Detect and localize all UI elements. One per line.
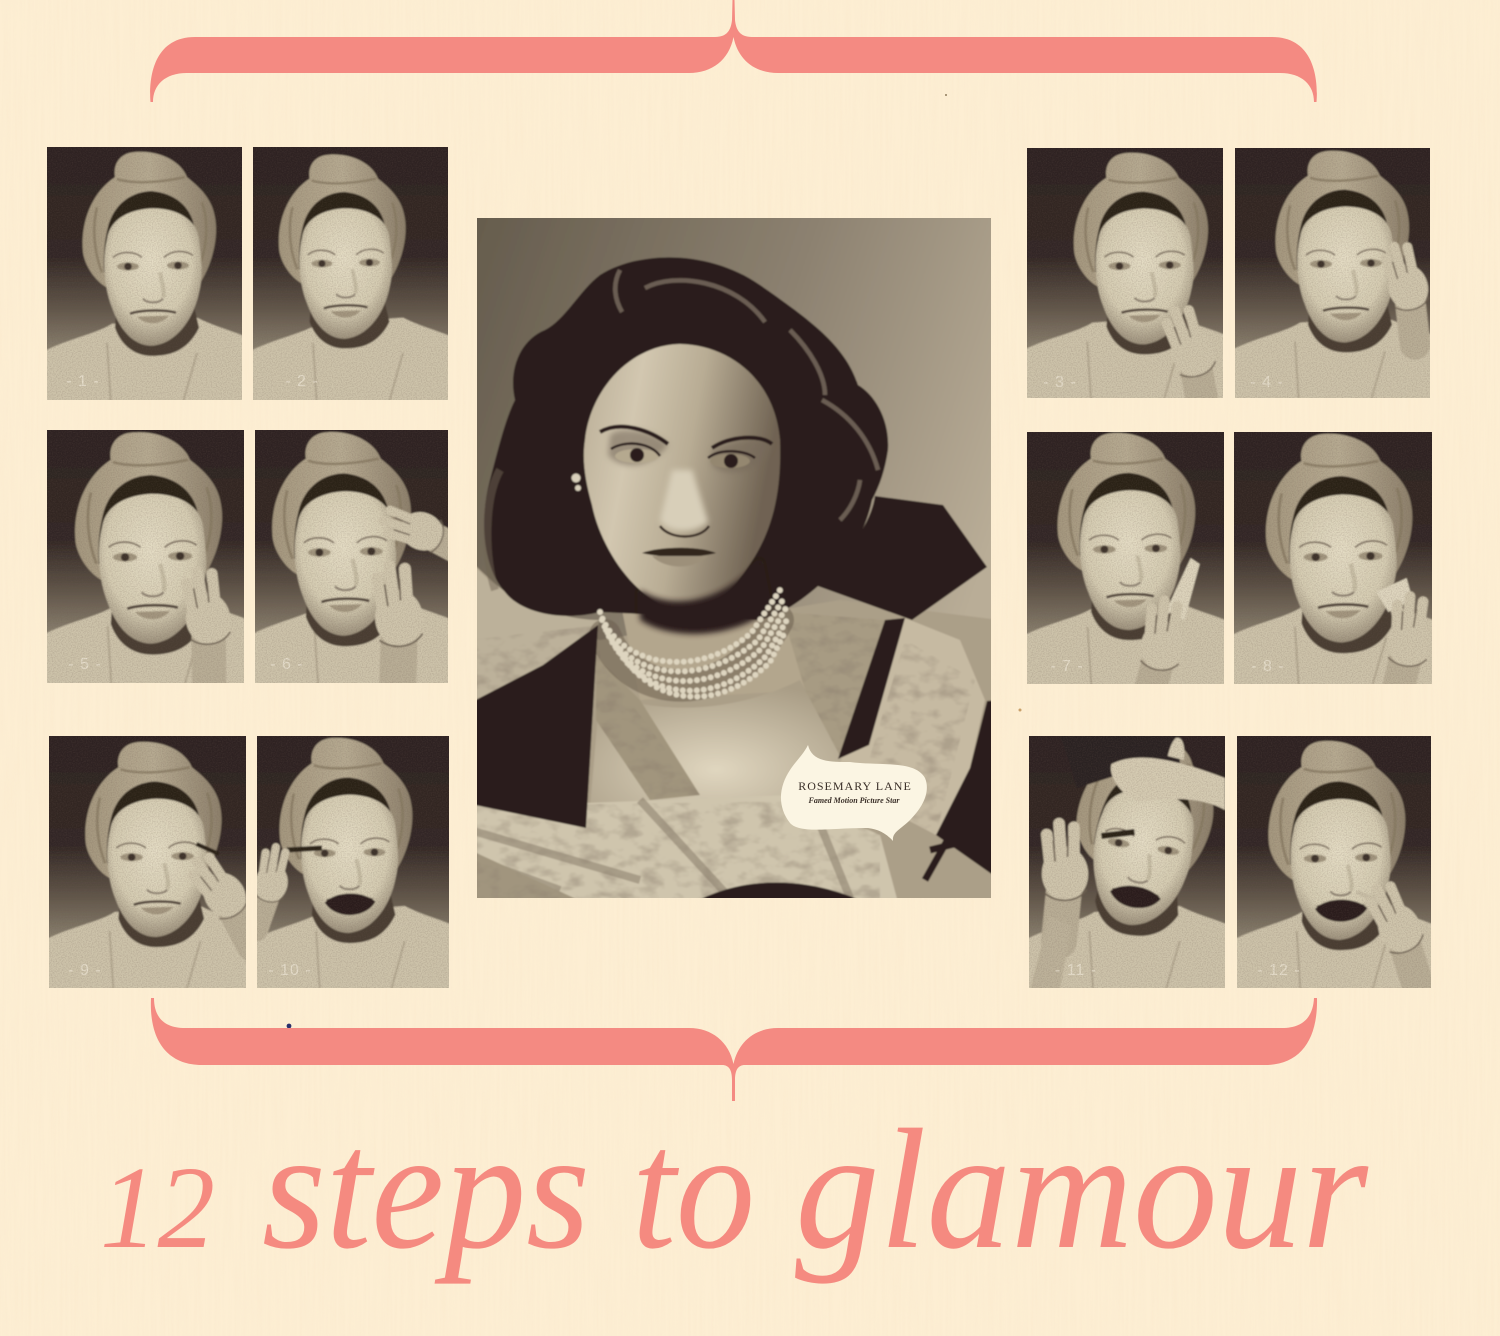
dress base bbox=[470, 560, 1000, 910]
photo: step 9 bbox=[49, 736, 246, 988]
caption bubble: Famed Motion Picture Star bbox=[808, 796, 900, 805]
lower veil bbox=[470, 795, 900, 910]
photo: step 5: - 5 - bbox=[68, 656, 102, 673]
chest bbox=[590, 680, 842, 808]
photo: step 6 bbox=[255, 430, 448, 683]
title: steps bbox=[262, 1095, 590, 1285]
photo: step 3: - 3 - bbox=[1043, 374, 1077, 391]
pearls bbox=[600, 590, 788, 697]
photo: step 10: - 10 - bbox=[268, 962, 312, 979]
photo: step 9: - 9 - bbox=[68, 962, 102, 979]
neck bbox=[620, 590, 810, 700]
photo: step 10 bbox=[257, 736, 449, 988]
photo: step 8 bbox=[1234, 432, 1432, 684]
title: to bbox=[632, 1095, 755, 1285]
photo: Rosemary Lane portrait bbox=[477, 218, 991, 898]
photo: step 7: - 7 - bbox=[1050, 658, 1084, 675]
photo: step 12 bbox=[1237, 736, 1431, 988]
title: 12 bbox=[100, 1142, 215, 1273]
right dark lace bbox=[815, 496, 987, 620]
left veil bbox=[470, 560, 600, 720]
photo: step 11 bbox=[1029, 736, 1225, 988]
lace texture bbox=[470, 612, 975, 910]
photo: step 7 bbox=[1027, 432, 1224, 684]
photo: step 8: - 8 - bbox=[1251, 658, 1285, 675]
caption bubble bbox=[781, 745, 927, 841]
photo: step 5 bbox=[47, 430, 244, 683]
lace strips bbox=[596, 656, 700, 800]
photo: step 1 bbox=[47, 147, 242, 400]
left dark collar bbox=[470, 625, 598, 828]
caption bubble: ROSEMARY LANE bbox=[798, 779, 912, 793]
photo: step 6: - 6 - bbox=[270, 656, 304, 673]
photo: step 1: - 1 - bbox=[66, 373, 100, 390]
right dress bbox=[838, 618, 985, 835]
photo: step 2: - 2 - bbox=[285, 373, 319, 390]
photo: step 12: - 12 - bbox=[1257, 962, 1301, 979]
top brace bbox=[150, 0, 1317, 102]
face bbox=[584, 344, 780, 608]
title: glamour bbox=[795, 1095, 1369, 1285]
photo: step 3 bbox=[1027, 148, 1223, 398]
photo: step 4 bbox=[1235, 148, 1430, 398]
bottom brace bbox=[150, 998, 1317, 1101]
photo: step 11: - 11 - bbox=[1055, 962, 1097, 979]
photo: step 4: - 4 - bbox=[1250, 374, 1284, 391]
hair bbox=[484, 257, 888, 620]
photo: step 2 bbox=[253, 147, 448, 400]
